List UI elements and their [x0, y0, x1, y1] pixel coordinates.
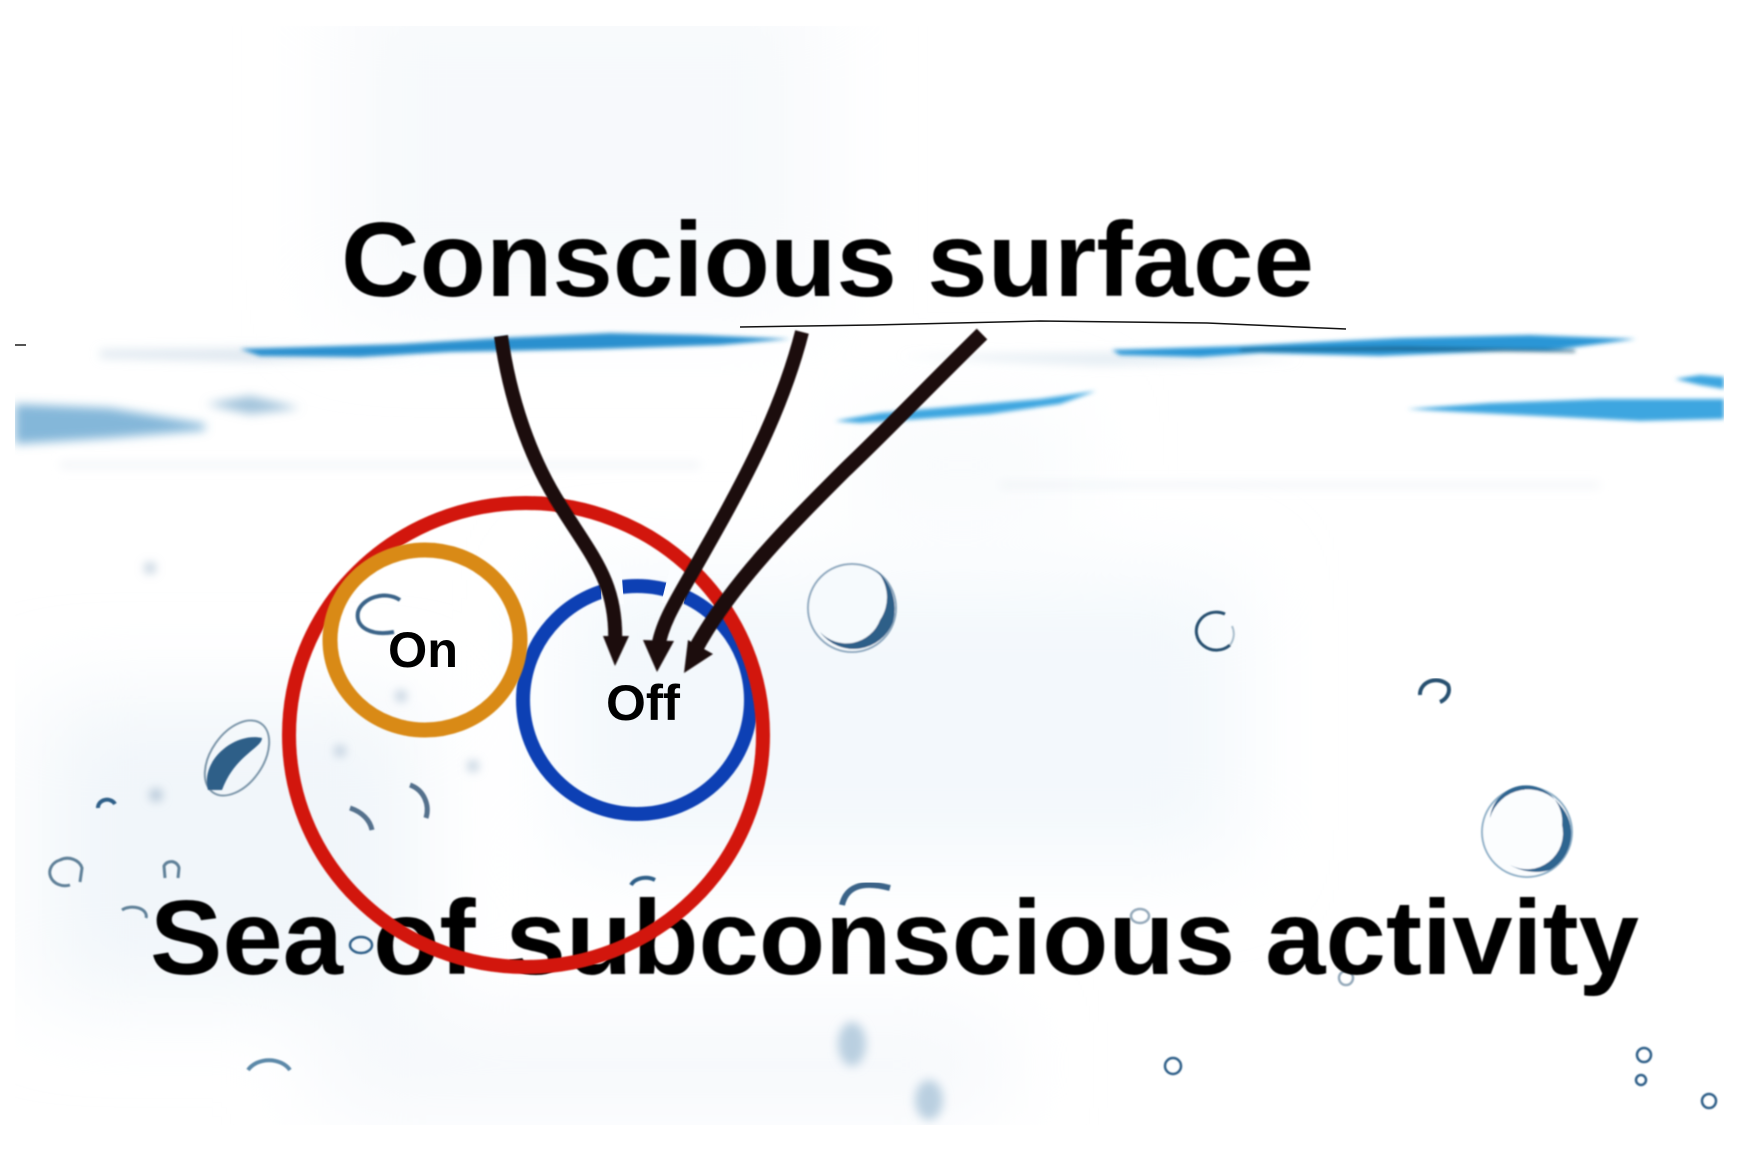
water bubbles: [50, 563, 1716, 1120]
label: on: On: [388, 622, 458, 678]
circle: blue off ring: [523, 586, 751, 814]
bubble: arc near text: [842, 885, 890, 905]
background: water photograph: [15, 320, 1724, 1125]
circle: red outer ring: [289, 503, 763, 967]
bubble: inside orange ring: [358, 596, 400, 633]
bubbles: tiny right group: [1131, 909, 1716, 1108]
infographic: conscious surface diagram: [15, 218, 1724, 1125]
arrow 2: [643, 332, 802, 672]
arrow halos on blue ring: [610, 565, 682, 605]
bubble: ring: [1196, 612, 1234, 650]
circle: orange on ring: [330, 550, 520, 730]
bubbles: small left group: [50, 800, 372, 1070]
arrows: conscious surface to off: [501, 332, 982, 673]
bubble: tilted left: [202, 718, 271, 798]
bubbles: inside red ring: [350, 785, 655, 885]
arrow 1: [501, 336, 629, 666]
bubble: large right: [1482, 785, 1572, 877]
water surface streaks: [15, 320, 1724, 450]
bubble: small right: [1420, 680, 1449, 702]
heading: sea of subconscious activity: Sea of subconscious activity: [150, 879, 1639, 997]
heading: conscious surface: Conscious surface: [341, 201, 1314, 319]
bubbles: blurred lower centre: [145, 563, 943, 1120]
arrow 3: [684, 334, 982, 673]
label: off: Off: [606, 675, 680, 731]
bubble: large centre: [808, 564, 896, 652]
